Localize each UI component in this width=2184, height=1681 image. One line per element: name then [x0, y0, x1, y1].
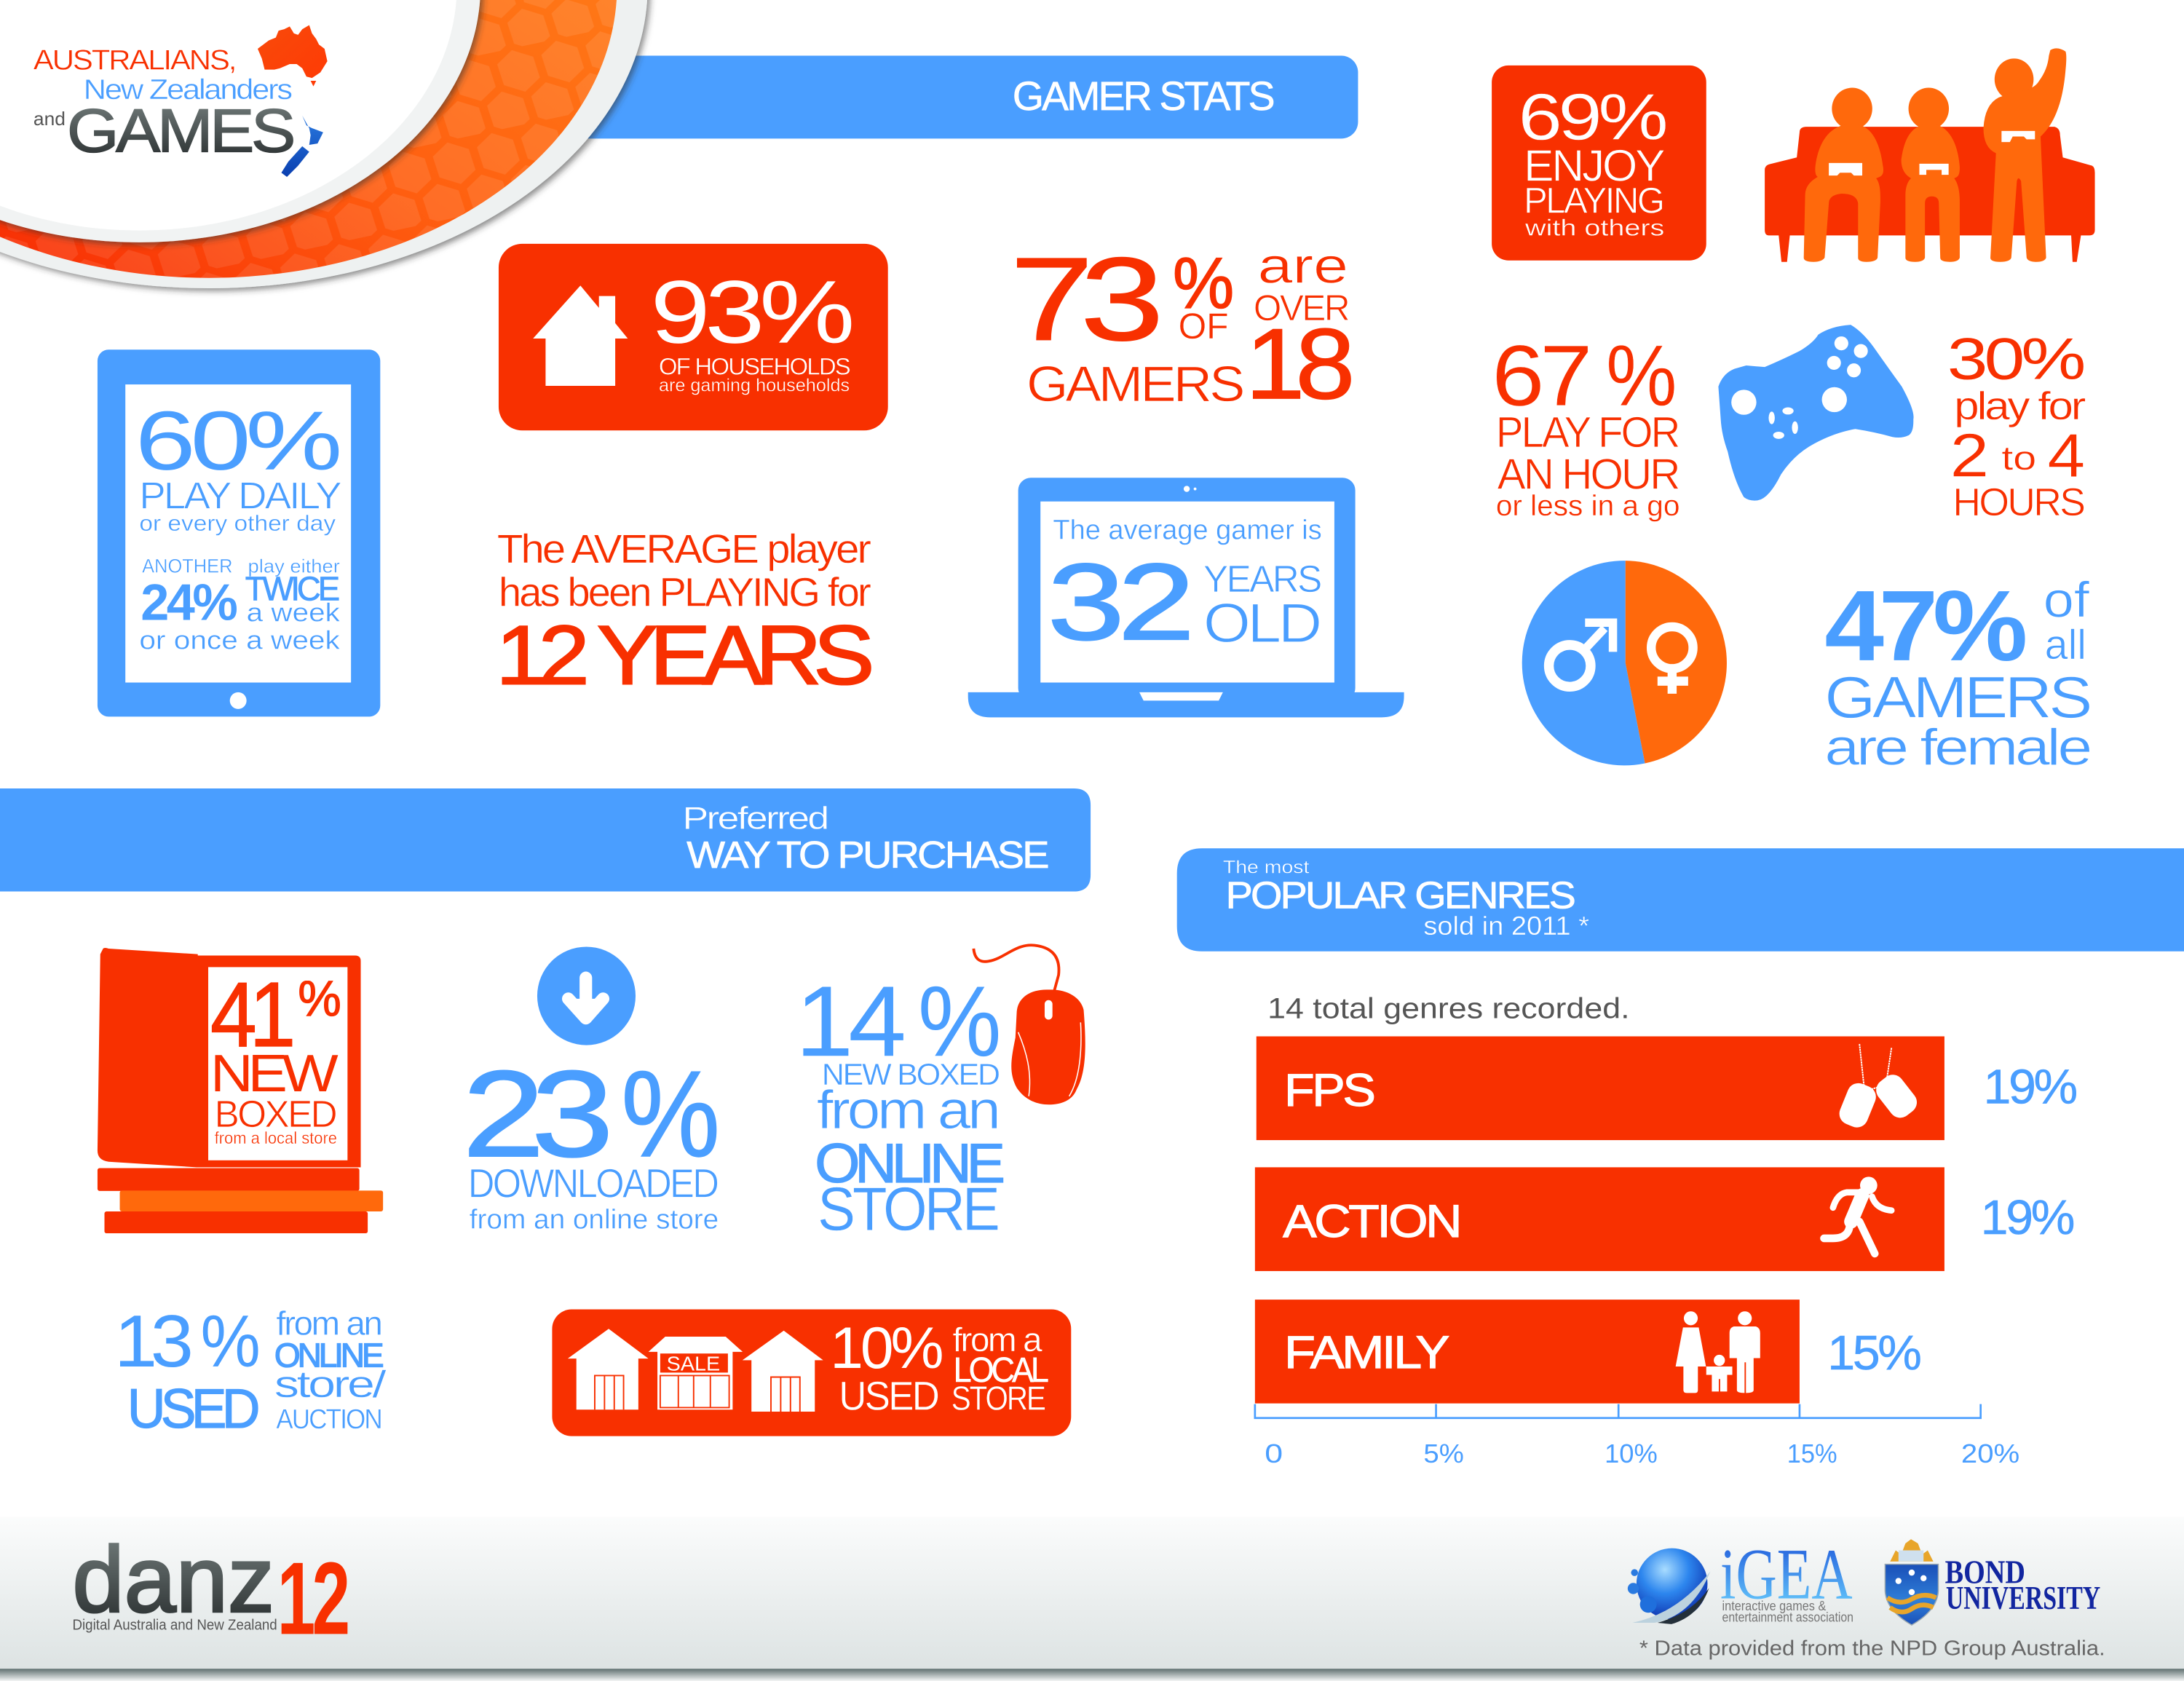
panel: tablet 60% play daily: ANOTHER — [142, 555, 233, 577]
stat: 30% play for 2 to 4 hours: 2 — [1950, 421, 1989, 489]
icon: sale shop — [649, 1337, 743, 1409]
stat: 73% of gamers are over 18 — [1010, 234, 1350, 420]
stat: 47% of all gamers are female — [1824, 570, 2090, 776]
stat: 23% downloaded from an online store: from an online store — [470, 1204, 719, 1235]
stat: 47% of all gamers are female: of — [2043, 572, 2090, 628]
icon: house left — [568, 1329, 649, 1409]
panel: 69% enjoy playing with others: ENJOY — [1524, 141, 1665, 191]
panel: 10% from a local used store: STORE — [951, 1379, 1045, 1417]
stat: 73% of gamers are over 18: OVER — [1254, 288, 1349, 328]
logo: iGEA: interactive games & — [1722, 1599, 1826, 1613]
header bar: preferred way to purchase: Preferred — [683, 800, 827, 836]
logo: danz12 — [72, 1528, 348, 1656]
stat: average player 12 years: has been PLAYING for — [499, 569, 871, 614]
stat: 73% of gamers are over 18: 18 — [1245, 308, 1350, 420]
stat: 14% new boxed from an online store — [795, 965, 1003, 1243]
panel: 93% of households — [499, 244, 888, 430]
chart axis: 20% — [1961, 1439, 2019, 1468]
logo: danz12: danz — [72, 1528, 274, 1632]
logo: iGEA: iGEA — [1720, 1533, 1853, 1614]
footer band — [0, 1517, 2184, 1681]
stat: 30% play for 2 to 4 hours: 4 — [2047, 421, 2085, 489]
panel: 10% from a local used store: from a — [953, 1321, 1042, 1358]
title badge: concentric rings with hexagon band — [0, 0, 648, 288]
title: Australians, New Zealanders and Games: GAMES — [67, 97, 293, 165]
stat: average player 12 years: The AVERAGE player — [497, 526, 871, 571]
panel: box with 41% new boxed from a local store: from a local store — [215, 1128, 337, 1147]
panel: 10% from a local used store — [552, 1310, 1071, 1436]
icon: sale shop: SALE — [667, 1353, 720, 1375]
stat: 23% downloaded from an online store: DOWNLOADED — [468, 1161, 718, 1206]
icon: dog tags — [1836, 1044, 1921, 1131]
panel: box with 41% new boxed from a local store: % — [298, 970, 341, 1027]
panel: box with 41% new boxed from a local store: 41 — [210, 963, 293, 1066]
panel: box with 41% new boxed from a local store: BOXED — [215, 1093, 336, 1135]
header bar: popular genres: sold in 2011 * — [1423, 911, 1589, 941]
icon: download arrow circle — [537, 946, 636, 1045]
icon: house — [533, 285, 628, 386]
stat: 30% play for 2 to 4 hours: to — [2001, 439, 2036, 477]
panel: 69% enjoy playing with others: with others — [1524, 214, 1664, 240]
panel: laptop average gamer 32 years old: 32 — [1048, 541, 1189, 662]
chart caption: total genres: 14 total genres recorded. — [1267, 992, 1630, 1025]
logo: iGEA: entertainment association — [1722, 1610, 1853, 1625]
stat: 23% downloaded from an online store: % — [621, 1045, 720, 1182]
stat: 23% downloaded from an online store — [462, 1045, 720, 1235]
icon: game controller — [1718, 325, 1914, 501]
stat: 14% new boxed from an online store: STORE — [818, 1174, 998, 1243]
header bar: preferred way to purchase — [0, 788, 1091, 892]
stat: 13% used from an online store or auction — [114, 1300, 387, 1440]
stat: 67% play for an hour or less: PLAY FOR — [1496, 408, 1679, 456]
panel: tablet 60% play daily: or once a week — [139, 625, 341, 655]
stat: 14% new boxed from an online store: 14 — [795, 965, 903, 1077]
header bar: popular genres — [1177, 848, 2184, 952]
title: Australians, New Zealanders and Games: AUSTRALIANS, — [33, 44, 235, 76]
header bar: preferred way to purchase: WAY TO PURCHASE — [687, 834, 1048, 876]
panel: 93% of households: 93% — [650, 262, 852, 362]
title: Australians, New Zealanders and Games: and — [33, 109, 66, 130]
stat: 67% play for an hour or less: % — [1606, 328, 1677, 424]
panel: laptop average gamer 32 years old: The average gamer is — [1053, 514, 1322, 545]
bar: Family 15%: FAMILY — [1284, 1327, 1449, 1378]
bar: Action 19% — [1255, 1167, 2074, 1271]
panel: 93% of households: are gaming households — [659, 376, 850, 396]
stat: average player 12 years — [496, 526, 871, 702]
stat: 13% used from an online store or auction: store/ — [274, 1363, 387, 1405]
stat: 13% used from an online store or auction: ONLINE — [274, 1337, 383, 1375]
stat: 67% play for an hour or less — [1492, 328, 1679, 522]
icon: computer mouse — [973, 945, 1085, 1104]
stat: 14% new boxed from an online store: from an — [817, 1079, 998, 1140]
icon: male symbol — [1549, 622, 1613, 687]
heading: gamer stats: GAMER STATS — [1013, 74, 1273, 119]
panel: tablet 60% play daily — [98, 349, 380, 716]
header bar: gamer stats — [557, 56, 1358, 138]
header bar: popular genres: POPULAR GENRES — [1226, 874, 1575, 916]
panel: tablet 60% play daily: TWICE — [245, 570, 339, 608]
logo: Bond University — [1885, 1539, 2100, 1625]
panel: 10% from a local used store: USED — [839, 1373, 938, 1418]
stat: 67% play for an hour or less: or less in a go — [1496, 489, 1679, 522]
stat: 73% of gamers are over 18: are — [1258, 237, 1348, 293]
icon: family figures — [1676, 1311, 1760, 1393]
stat: 47% of all gamers are female: all — [2045, 622, 2086, 668]
panel: tablet 60% play daily: 60% — [135, 395, 339, 488]
chart axis: 0 — [1265, 1439, 1283, 1468]
panel: tablet 60% play daily: PLAY DAILY — [139, 474, 341, 516]
chart axis: 10% — [1605, 1439, 1658, 1468]
bar: FPS 19%: 19% — [1983, 1059, 2077, 1114]
panel: box with 41% new boxed from a local store — [98, 948, 383, 1233]
icon: three gamers on a couch — [1765, 48, 2095, 262]
bar: Family 15%: 15% — [1827, 1326, 1920, 1380]
panel: laptop average gamer 32 years old: OLD — [1203, 593, 1319, 654]
panel: laptop average gamer 32 years old: YEARS — [1203, 558, 1321, 600]
bar: FPS 19%: FPS — [1284, 1065, 1374, 1116]
bar: Action 19%: ACTION — [1283, 1196, 1460, 1247]
logo: Bond University: UNIVERSITY — [1946, 1579, 2100, 1616]
stat: 73% of gamers are over 18: 73 — [1010, 234, 1158, 365]
panel: tablet 60% play daily: 24% — [141, 574, 237, 631]
stat: 14% new boxed from an online store: ONLINE — [815, 1133, 1003, 1195]
stat: 30% play for 2 to 4 hours: HOURS — [1952, 481, 2084, 524]
panel: tablet 60% play daily: or every other day — [139, 511, 336, 536]
stat: 47% of all gamers are female: GAMERS — [1824, 665, 2089, 730]
footnote: data source: * Data provided from the NPD Group Australia. — [1639, 1637, 2105, 1661]
stat: 14% new boxed from an online store: % — [918, 965, 1002, 1077]
stat: 13% used from an online store or auction: % — [201, 1300, 261, 1383]
stat: 73% of gamers are over 18: OF — [1179, 306, 1229, 347]
bar: Action 19%: 19% — [1981, 1190, 2074, 1245]
stat: 30% play for 2 to 4 hours: 30% — [1947, 326, 2084, 392]
bar chart: popular genres — [1255, 1037, 2077, 1468]
icon: female symbol — [1651, 627, 1693, 694]
panel: tablet 60% play daily: play either — [248, 556, 340, 577]
logo: Bond University: BOND — [1945, 1554, 2025, 1591]
stat: 47% of all gamers are female: 47% — [1824, 570, 2025, 682]
panel: box with 41% new boxed from a local store: NEW — [210, 1044, 339, 1103]
stat: 73% of gamers are over 18: % — [1173, 243, 1234, 324]
panel: tablet 60% play daily: a week — [247, 597, 341, 627]
stat: 13% used from an online store or auction: USED — [127, 1378, 258, 1440]
chart axis: 5% — [1423, 1439, 1464, 1468]
chart axis — [1255, 1404, 2019, 1468]
icon: New Zealand map — [281, 116, 323, 177]
panel: 10% from a local used store: LOCAL — [954, 1351, 1048, 1390]
stat: 23% downloaded from an online store: 23 — [462, 1045, 608, 1182]
panel: 69% enjoy playing with others: 69% — [1518, 81, 1666, 154]
pie chart: gender split with male and female symbols — [1522, 561, 1727, 765]
panel: laptop average gamer 32 years old — [968, 478, 1404, 717]
logo: iGEA — [1628, 1533, 1853, 1625]
panel: 69% enjoy playing with others: PLAYING — [1524, 181, 1663, 221]
stat: 14% new boxed from an online store: NEW BOXED — [822, 1057, 1000, 1091]
panel: 69% enjoy playing with others — [1492, 66, 1706, 261]
stat: average player 12 years: 12 YEARS — [496, 609, 871, 702]
stat: 73% of gamers are over 18: GAMERS — [1026, 356, 1243, 412]
stat: 13% used from an online store or auction: AUCTION — [276, 1404, 381, 1435]
icon: running figure — [1824, 1176, 1891, 1254]
chart axis: 15% — [1787, 1439, 1837, 1468]
icon: Australia map — [258, 25, 328, 87]
bar: Family 15% — [1255, 1300, 1920, 1404]
stat: 13% used from an online store or auction: from an — [276, 1305, 381, 1342]
icon: house right — [743, 1331, 823, 1412]
bar: FPS 19% — [1257, 1037, 2077, 1140]
stat: 67% play for an hour or less: AN HOUR — [1497, 450, 1679, 499]
stat: 13% used from an online store or auction: 13 — [114, 1300, 190, 1383]
logo: danz12: Digital Australia and New Zealand — [72, 1618, 277, 1634]
stat: 47% of all gamers are female: are female — [1824, 719, 2090, 776]
panel: 93% of households: OF HOUSEHOLDS — [659, 354, 850, 380]
stat: 30% play for 2 to 4 hours: play for — [1954, 385, 2085, 428]
stat: 67% play for an hour or less: 67 — [1492, 328, 1588, 424]
header bar: popular genres: The most — [1223, 858, 1310, 878]
panel: 10% from a local used store: 10% — [830, 1316, 942, 1381]
title: Australians, New Zealanders and Games: New Zealanders — [84, 74, 292, 106]
title: Australians, New Zealanders and Games — [33, 25, 328, 177]
stat: 30% play for 2 to 4 hours — [1947, 326, 2085, 524]
logo: danz12: 12 — [277, 1541, 348, 1656]
